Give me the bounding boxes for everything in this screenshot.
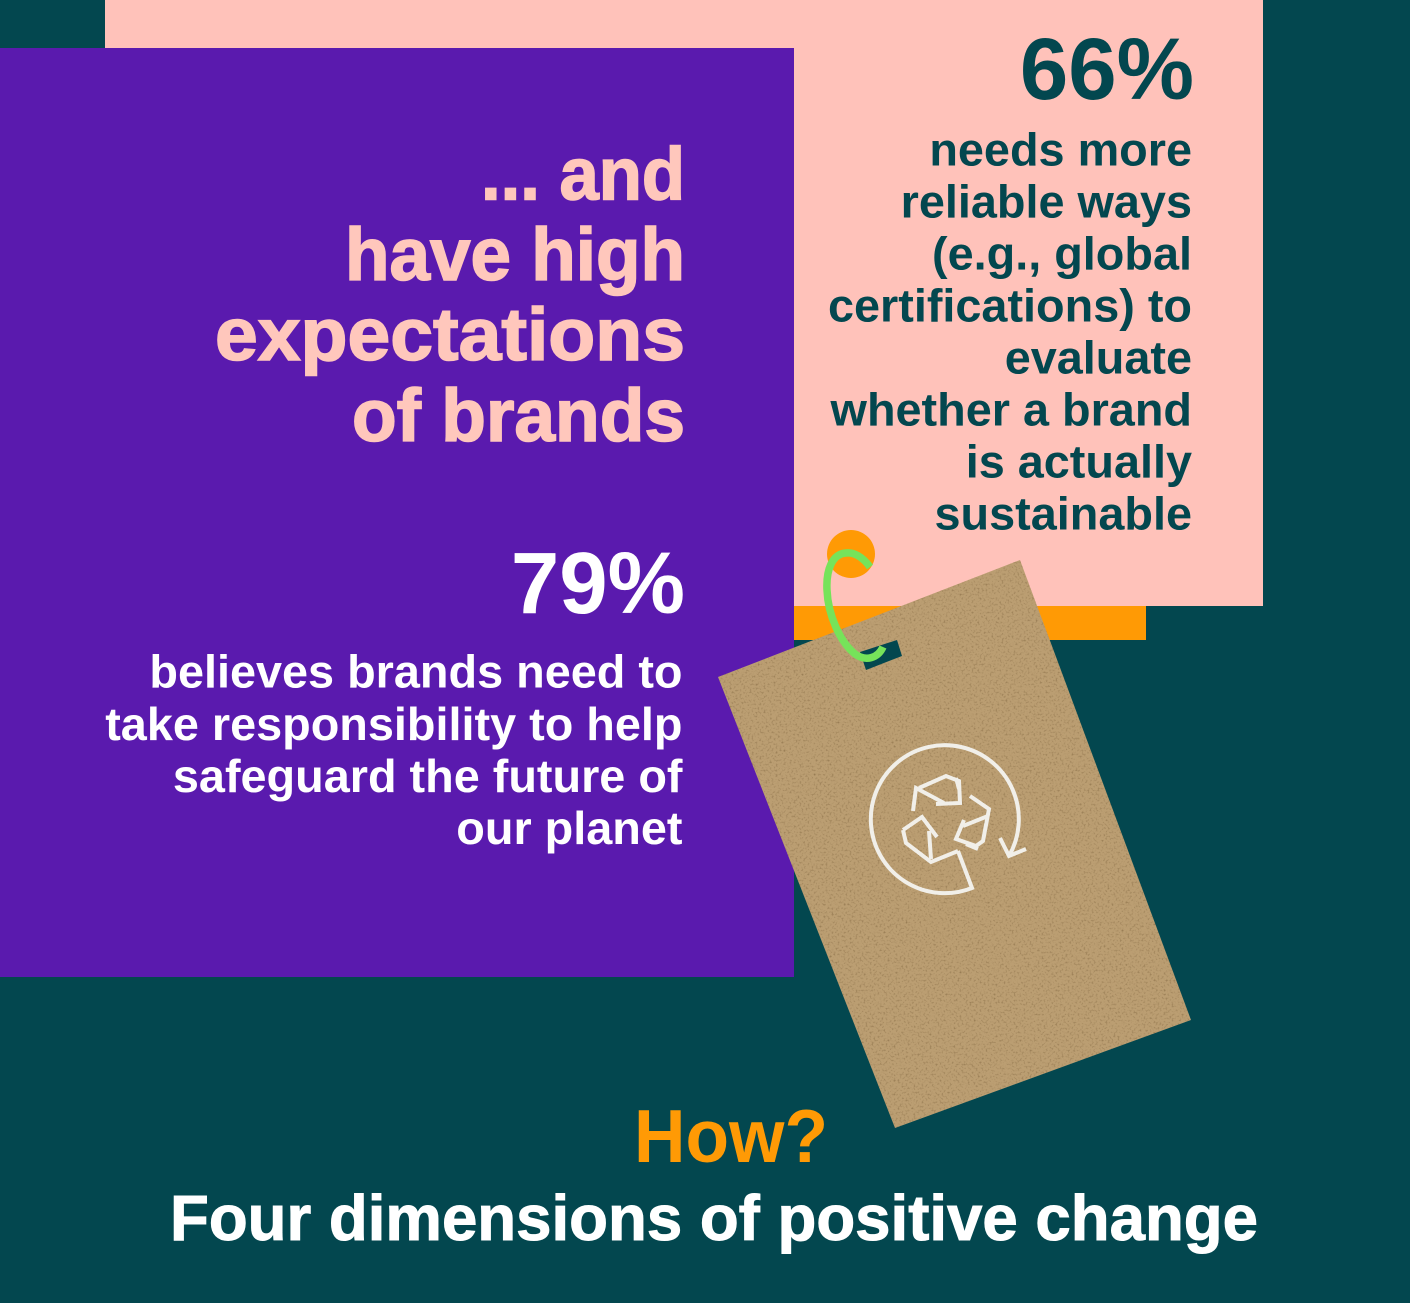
statistic: 66%: 66% [1020,21,1194,118]
text block: 66% description: reliable ways [901,176,1192,228]
text block: 79% description: take responsibility to help [105,698,682,750]
text block: 66% description: is actually [966,436,1192,488]
heading: and have high expectations of brands [215,132,685,457]
orange accent bar [794,606,1146,640]
heading: and have high expectations of brands: of brands [352,374,685,457]
string loop [827,553,883,658]
icon: orange tag hole circle [827,530,875,578]
panel: pink statistic panel [105,0,1263,640]
illustration: kraft paper swing tag [718,553,1191,1128]
statistic: 79%: 79% [511,535,685,632]
text block: 79% description [105,646,683,854]
heading: Four dimensions of positive change: Four dimensions of positive change [170,1182,1258,1254]
heading: How?: How? [634,1094,828,1178]
tag slot [860,640,902,670]
text block: 66% description [828,124,1192,540]
panel: purple expectations panel [0,48,794,977]
text block: 79% description: safeguard the future of [173,750,683,802]
heading: and have high expectations of brands: expectations [215,293,685,376]
text block: 66% description: whether a brand [830,384,1192,436]
text block: 79% description: our planet [456,802,683,854]
heading: and have high expectations of brands: have high [345,213,685,296]
text block: 66% description: certifications) to [828,280,1192,332]
text block: 79% description: believes brands need to [149,646,682,698]
text block: 66% description: evaluate [1005,332,1192,384]
text block: 66% description: needs more [929,124,1192,176]
icon: recycling symbol [871,745,1026,893]
text block: 66% description: sustainable [935,488,1192,540]
heading: and have high expectations of brands: ... and [481,132,685,216]
text block: 66% description: (e.g., global [932,228,1192,280]
